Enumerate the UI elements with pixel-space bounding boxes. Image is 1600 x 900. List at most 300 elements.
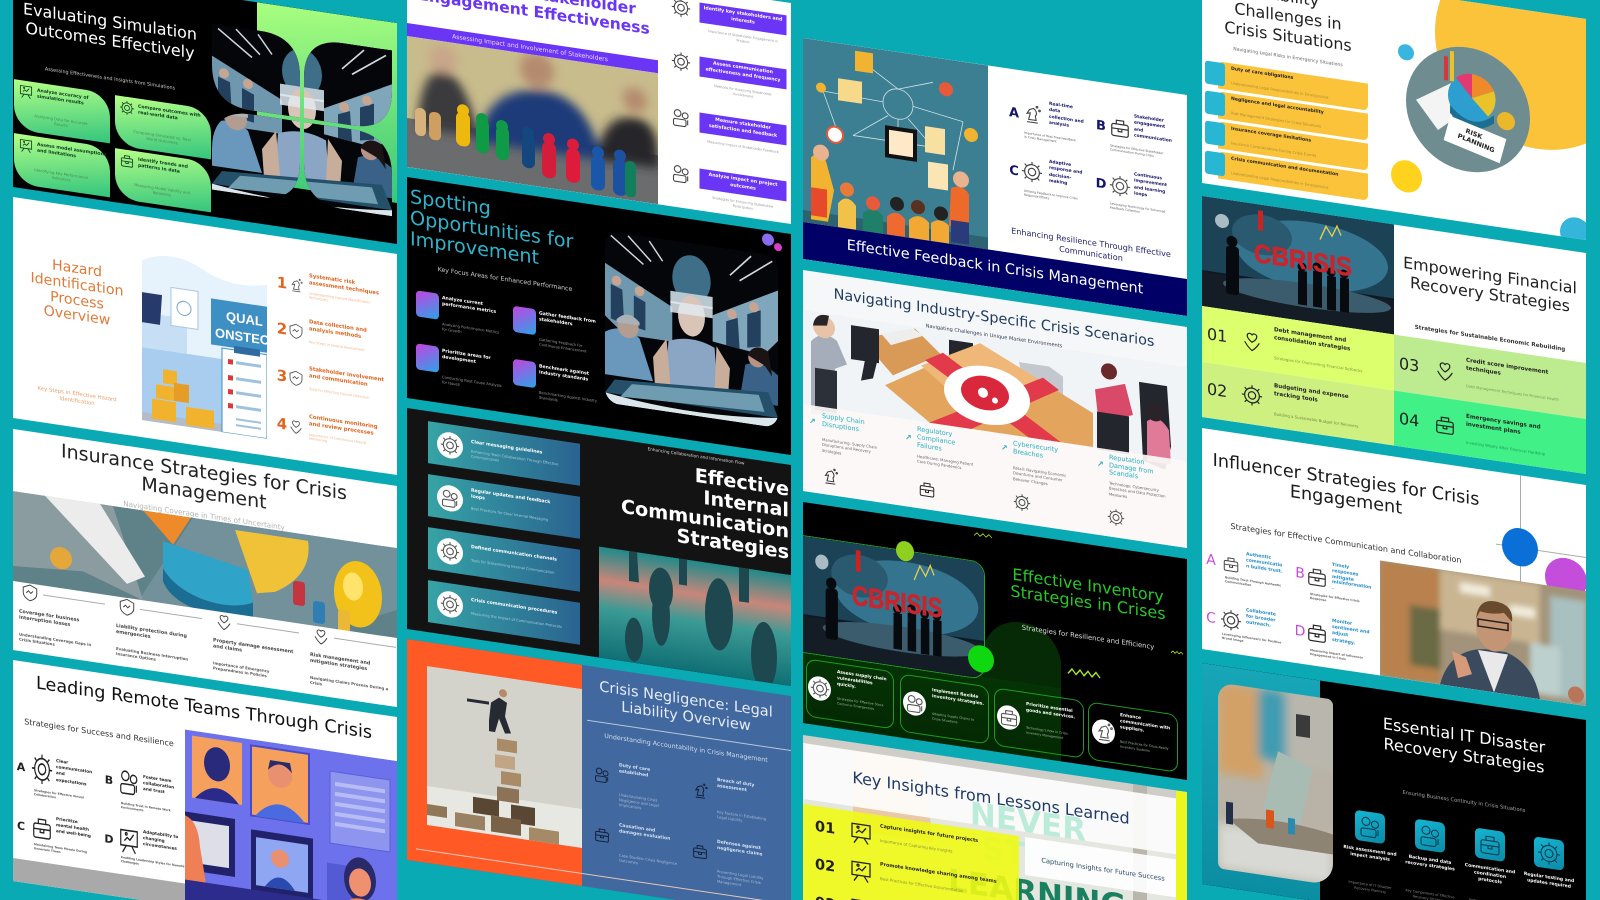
note: Preparedness in Policies xyxy=(213,666,267,679)
note: Navigating Claims Process During a xyxy=(310,675,388,691)
card text: Enhance xyxy=(1120,713,1141,721)
icon tile xyxy=(1354,810,1384,844)
heading: interruption losses xyxy=(19,616,70,629)
letter: C xyxy=(1206,610,1215,627)
card note: Strategies for Effective Stock xyxy=(837,696,883,707)
item text: response and xyxy=(1049,166,1082,176)
green panel xyxy=(257,2,397,203)
row 1 xyxy=(1204,59,1368,112)
icon xyxy=(290,370,302,386)
note: Measuring Impact of Stakeholder Feedback xyxy=(707,140,779,154)
row note: Understanding Legal Responsibilities in Emergencies xyxy=(1230,171,1328,190)
blue circle xyxy=(1502,526,1538,569)
icon xyxy=(1434,411,1456,439)
item text: collaboration xyxy=(143,780,174,790)
title: Overview xyxy=(44,303,110,329)
row text: Duty of care obligations xyxy=(1230,67,1293,81)
card note xyxy=(1120,739,1169,756)
item text xyxy=(539,311,596,332)
item note: Environments xyxy=(121,805,144,812)
heading: mitigation strategies xyxy=(310,659,367,673)
card note: Inventory Systems xyxy=(1120,744,1150,753)
note xyxy=(1109,480,1166,505)
white note panel xyxy=(1025,837,1177,898)
row 4 xyxy=(1204,149,1368,202)
title: Essential IT Disaster xyxy=(1382,714,1545,757)
icon tile xyxy=(1204,60,1224,86)
heading: Cybersecurity xyxy=(1013,439,1058,454)
lime circle xyxy=(896,540,914,562)
big yellow circle xyxy=(1434,0,1600,164)
icon xyxy=(292,278,303,292)
title: Influencer Strategies for Crisis xyxy=(1212,451,1479,510)
item A xyxy=(1204,540,1294,602)
item C xyxy=(1204,598,1294,660)
item note: Building Trust in Remote Work xyxy=(121,801,171,812)
letter: B xyxy=(105,773,113,787)
item text: damages evaluation xyxy=(619,829,670,842)
purple box: Assess communication xyxy=(713,62,773,76)
leaf text xyxy=(138,157,188,175)
purple box: Analyze impact on project xyxy=(709,173,777,188)
column 3 xyxy=(999,435,1091,531)
photo: miniature rubble xyxy=(1218,682,1332,885)
leaf text: Assess model assumptions xyxy=(37,143,107,158)
item text xyxy=(143,774,174,797)
step 1 xyxy=(669,0,791,59)
note: Retail: Navigating Economic xyxy=(1013,465,1066,478)
photo: crisis xyxy=(803,535,985,680)
illustration: team network xyxy=(803,38,988,249)
subtitle: Strategies for Effective Communication and Collaboration xyxy=(1230,522,1461,565)
item text: changing xyxy=(143,835,165,843)
panel: key insights xyxy=(803,735,1187,900)
item text: Authentic xyxy=(1246,552,1271,561)
purple band xyxy=(407,23,658,73)
item text: assessment xyxy=(717,784,747,793)
item note: Engagement in Crisis xyxy=(1310,652,1345,661)
icon tile xyxy=(1204,90,1224,116)
row 3 xyxy=(428,527,580,592)
note: Projects xyxy=(736,38,750,44)
frosted lower panel xyxy=(803,404,1187,548)
item text xyxy=(717,778,754,796)
item note: Best Practices for Effective Documentation xyxy=(880,876,963,893)
leaf note: World Outcomes xyxy=(146,136,178,145)
letter: D xyxy=(1294,623,1305,640)
illustration: video call xyxy=(185,730,397,900)
item text: Real-time xyxy=(1049,102,1073,110)
note: Care During Pandemics xyxy=(917,459,961,471)
title: Crisis Negligence: Legal xyxy=(599,679,773,721)
item text: and xyxy=(56,770,65,777)
heading: and claims xyxy=(213,645,242,654)
item D xyxy=(1294,612,1380,674)
card 4 xyxy=(1088,701,1178,773)
item text: circumstances xyxy=(143,841,177,851)
white lower area xyxy=(13,581,397,707)
item note: Leveraging Influencers for Positive xyxy=(1222,632,1281,645)
panel: crisis negligence xyxy=(407,639,791,900)
letter: B xyxy=(1295,565,1304,582)
item 02 xyxy=(811,846,1011,900)
item text: Capture insights for future projects xyxy=(880,823,978,844)
icon tile xyxy=(1474,828,1504,862)
heading: Reputation xyxy=(1109,453,1144,466)
purple box xyxy=(700,56,786,89)
bar xyxy=(1218,151,1368,201)
item 1 xyxy=(277,273,379,305)
item note: Leveraging Technology for Enhanced xyxy=(1110,201,1165,214)
row note: Enhancing Team Collaboration Through Effective xyxy=(471,450,558,466)
leaf text: simulation results xyxy=(37,95,84,107)
connector xyxy=(237,623,299,633)
yellow dot xyxy=(1390,158,1422,195)
heading xyxy=(917,425,955,455)
arrow: ↗ xyxy=(905,433,912,443)
purple box xyxy=(700,168,786,201)
letter: A xyxy=(1206,552,1215,569)
item text: mitigate xyxy=(1332,574,1353,583)
item note: Brand Image xyxy=(1222,636,1243,643)
icon circle xyxy=(808,675,831,702)
item text: analysis methods xyxy=(309,326,361,340)
note xyxy=(1013,465,1066,489)
row text: Defined communication channels xyxy=(471,545,557,563)
item text: Promote knowledge sharing among teams xyxy=(880,861,997,885)
photo: crisis xyxy=(1202,196,1394,335)
column text: Regular testing and xyxy=(1523,872,1574,884)
icon tile xyxy=(1204,120,1224,146)
title xyxy=(1224,0,1351,56)
title: Effective xyxy=(695,464,789,501)
icon xyxy=(849,857,873,886)
cell text: tracking tools xyxy=(1274,391,1317,403)
note: Strategies for Enhancing Stakeholder xyxy=(712,196,774,209)
icon xyxy=(31,814,53,843)
item note: Continuous Enhancement xyxy=(539,343,587,354)
item note: Collaboration xyxy=(34,792,56,799)
title: Identification xyxy=(30,270,124,300)
icon xyxy=(22,584,38,602)
heading: Breaches xyxy=(1013,447,1043,460)
column 1 xyxy=(1338,805,1400,900)
panel: leading remote teams xyxy=(13,660,397,900)
item text xyxy=(442,296,496,316)
leaf note: Comparing Simulated vs. Real xyxy=(133,129,191,142)
card note xyxy=(932,712,974,727)
item text xyxy=(1049,160,1082,190)
item text: communication xyxy=(1134,134,1172,144)
item note: Enabling Leadership Styles for Remote xyxy=(121,855,184,868)
blue dot xyxy=(1398,43,1414,61)
item text: Systematic risk xyxy=(309,273,355,286)
heading xyxy=(1013,439,1058,462)
card note: Crisis Situations xyxy=(932,716,958,724)
item D xyxy=(103,812,185,879)
item text: Prioritize xyxy=(56,816,78,824)
column note: Importance of IT Disaster xyxy=(1348,880,1391,890)
photo: pie chart xyxy=(13,491,397,638)
panel: inventory strategies xyxy=(803,502,1187,780)
item note xyxy=(539,338,587,355)
card note: Adapting Supply Chains to xyxy=(932,712,974,722)
icon xyxy=(671,104,691,131)
heading: Liability protection during xyxy=(116,624,187,639)
icon xyxy=(671,0,691,21)
item text: Stakeholder xyxy=(1134,114,1164,124)
row note: Communication xyxy=(471,455,499,463)
item note xyxy=(717,810,766,827)
panel: liability challenges xyxy=(1202,0,1586,240)
subtitle: Capturing Insights for Future Success xyxy=(1041,856,1165,883)
icon tile xyxy=(416,343,439,373)
item text: . xyxy=(1332,586,1333,591)
item 1 xyxy=(592,756,684,826)
photo: pawns xyxy=(407,36,658,204)
row note: Risk Management Strategies for Crisis Situations xyxy=(1230,111,1321,129)
icon xyxy=(594,824,610,846)
number: 1 xyxy=(277,273,287,293)
item text: assessment techniques xyxy=(309,280,379,296)
panel: effective feedback xyxy=(803,38,1187,316)
heading: Supply Chain xyxy=(822,412,865,426)
item note: in Crisis Management xyxy=(1024,135,1057,144)
connector xyxy=(140,609,202,619)
note: Downturns and Consumer xyxy=(1013,470,1062,483)
illustration xyxy=(142,256,267,439)
note: Crisis Situations xyxy=(19,637,55,647)
item D xyxy=(1095,159,1187,228)
title: Leading Remote Teams Through Crisis xyxy=(36,673,372,743)
decor dot pink xyxy=(774,243,782,252)
item text xyxy=(56,758,92,788)
photo: presenter xyxy=(1380,560,1586,706)
icon circle xyxy=(903,690,926,717)
column 2 xyxy=(1398,814,1460,900)
clover photo xyxy=(212,24,392,216)
subtitle: Understanding Accountability in Crisis Management xyxy=(604,733,768,764)
leaf text: Analyze accuracy of xyxy=(37,89,89,101)
item 4 xyxy=(277,414,378,445)
column 4 xyxy=(1518,832,1580,900)
icon xyxy=(692,779,708,802)
item note: Response xyxy=(1310,596,1326,602)
title: Hazard xyxy=(52,257,102,281)
item text xyxy=(619,763,650,780)
item note: Gathering Feedback for xyxy=(539,338,582,348)
item text: Monitor xyxy=(1332,619,1352,627)
item B xyxy=(103,753,185,820)
note xyxy=(917,454,973,473)
purple box: satisfaction and feedback xyxy=(709,124,777,139)
icon xyxy=(31,752,53,787)
dark green glow xyxy=(803,622,1061,761)
panel: IT disaster recovery xyxy=(1202,663,1586,900)
note: Behavior Changes xyxy=(1013,476,1048,486)
leaf text xyxy=(37,88,89,107)
subtitle: Navigating Coverage in Times of Uncertainty xyxy=(123,499,285,532)
item text: and well-being xyxy=(56,828,91,839)
item note: Importance of Continuous Hazard xyxy=(309,433,366,445)
item text: development xyxy=(442,355,476,365)
cell text xyxy=(1274,327,1350,354)
heading: Disruptions xyxy=(822,420,859,433)
item text xyxy=(1246,608,1275,631)
item 2 xyxy=(277,319,367,352)
leaf note: Identifying Key Performance xyxy=(34,167,88,180)
item text: communicatio xyxy=(1246,558,1282,569)
title band xyxy=(13,429,397,548)
column 2 xyxy=(116,598,202,662)
number: 01 xyxy=(1206,324,1227,346)
column note: Key Components of Effective xyxy=(1405,888,1454,900)
note: Understanding Coverage Gaps in xyxy=(19,631,91,647)
row text: Insurance coverage limitations xyxy=(1230,127,1311,144)
icon tile xyxy=(1534,836,1564,871)
note: Importance of Emergency xyxy=(213,660,269,674)
card text: goods and services. xyxy=(1026,708,1075,720)
item note: Importance of Capturing Key Insights xyxy=(880,838,952,854)
subtitle: Strategies for Sustainable Economic Rebuilding xyxy=(1414,325,1565,353)
purple box: interests xyxy=(731,17,755,26)
purple box: Measure stakeholder xyxy=(715,118,771,131)
number: 02 xyxy=(815,857,835,876)
cell 02 xyxy=(1202,362,1394,446)
title: Empowering Financial xyxy=(1403,253,1576,298)
small squiggle top xyxy=(973,530,993,540)
item note xyxy=(442,322,499,341)
small squiggle right xyxy=(1170,649,1184,657)
decor line vertical xyxy=(1518,475,1521,585)
title: Opportunities for xyxy=(410,206,573,253)
item text: sentiment and xyxy=(1332,625,1369,636)
item note: Monitoring xyxy=(309,437,327,444)
note xyxy=(213,660,269,680)
photo: block tower xyxy=(427,666,582,848)
subtitle: Enhancing Collaboration and Information Flow xyxy=(648,446,744,466)
item note: Tools for Effective Hazard Detection xyxy=(309,387,370,400)
panel: spotting opportunities xyxy=(407,177,791,455)
icon xyxy=(1021,158,1043,186)
column text: coordination xyxy=(1473,870,1506,880)
card text xyxy=(837,670,887,695)
heading: Risk management and xyxy=(310,653,370,667)
item note: Feedback Collection xyxy=(1110,206,1140,214)
note: Manufacturing: Supply Chain xyxy=(822,437,877,450)
cell text xyxy=(1466,358,1548,385)
card 3 xyxy=(994,687,1084,759)
card text: Assess supply chain xyxy=(837,670,887,682)
row 2 xyxy=(1204,89,1368,142)
title xyxy=(30,257,124,329)
cell text: Budgeting and expense xyxy=(1274,383,1348,400)
purple box: Identify key stakeholders and xyxy=(704,6,782,23)
yellow stripe xyxy=(1176,790,1187,900)
cell 03 xyxy=(1394,335,1586,419)
subtitle: Ensuring Business Continuity in Crisis Situations xyxy=(1402,790,1525,814)
icon xyxy=(1109,172,1131,200)
icon xyxy=(290,420,302,434)
cell text: Credit score improvement xyxy=(1466,358,1548,376)
row 4 xyxy=(428,580,580,645)
panel: navigating industry crisis xyxy=(803,270,1187,548)
illustration: warehouse gear xyxy=(803,310,1187,548)
item text: Continuous xyxy=(1134,172,1162,182)
card text xyxy=(1026,702,1075,721)
item note: Outcomes xyxy=(619,858,638,865)
icon xyxy=(1240,383,1262,408)
number: 02 xyxy=(1206,379,1227,401)
note: Involvement xyxy=(733,91,753,98)
icon xyxy=(849,819,873,848)
heading xyxy=(310,653,370,674)
cell note: Strategies for Overcoming Financial Setbacks xyxy=(1274,355,1362,373)
heading: Property damage assessment xyxy=(213,638,293,655)
panel: internal communication xyxy=(407,408,791,686)
panel: influencer strategies xyxy=(1202,428,1586,706)
item text: outreach. xyxy=(1246,621,1270,629)
cell note: Building a Sustainable Budget for Recovery xyxy=(1274,411,1358,429)
icon xyxy=(1109,115,1131,141)
icon xyxy=(821,465,839,487)
title: Evaluating Simulation xyxy=(23,0,197,44)
illustration: QUAL xyxy=(226,309,263,329)
cell text xyxy=(1466,414,1540,440)
column 1 xyxy=(807,407,899,502)
title: Recovery Strategies xyxy=(1410,273,1569,316)
letter: D xyxy=(1096,176,1106,193)
item text: and communication xyxy=(309,373,368,388)
card note: Technology's Role in Crisis xyxy=(1026,726,1068,736)
row text: Negligence and legal accountability xyxy=(1230,97,1323,116)
item text: Breach of duty xyxy=(717,778,754,788)
number: 3 xyxy=(277,366,287,386)
icon xyxy=(1107,506,1125,529)
item text: and xyxy=(1134,127,1143,134)
round photo: risk planning: RISK xyxy=(1464,127,1484,141)
note: Evaluating Business Interruption xyxy=(116,646,188,662)
item note xyxy=(619,793,659,814)
item text xyxy=(143,829,178,853)
leaf note: Reliability xyxy=(153,190,171,198)
item note xyxy=(619,853,677,872)
title: Key Insights from Lessons Learned xyxy=(852,768,1130,828)
cell text xyxy=(1274,383,1348,409)
item note: Key Factors in Establishing xyxy=(717,810,766,821)
subtitle: Strategies for Success and Resilience xyxy=(24,717,174,748)
item text xyxy=(1134,172,1167,203)
item note: Communication During Crisis xyxy=(1110,148,1154,158)
leaf note: Measuring Model Validity and xyxy=(134,182,190,195)
item C xyxy=(1007,146,1097,215)
icon tile xyxy=(416,290,439,320)
column text: updates required xyxy=(1527,878,1570,890)
icon xyxy=(312,624,330,647)
item text: expectations xyxy=(56,777,86,786)
item text: Data collection and xyxy=(309,319,367,334)
item note: Strategies for Effective Crisis xyxy=(1310,592,1359,603)
icon: document xyxy=(120,155,134,168)
icon xyxy=(671,160,691,187)
title: Internal xyxy=(703,486,789,522)
icon xyxy=(1222,551,1240,578)
icon circle xyxy=(1092,718,1115,745)
orange side xyxy=(407,639,582,886)
focus 1 xyxy=(416,290,506,354)
item text: stakeholders xyxy=(539,318,572,328)
icon: board xyxy=(20,139,32,153)
